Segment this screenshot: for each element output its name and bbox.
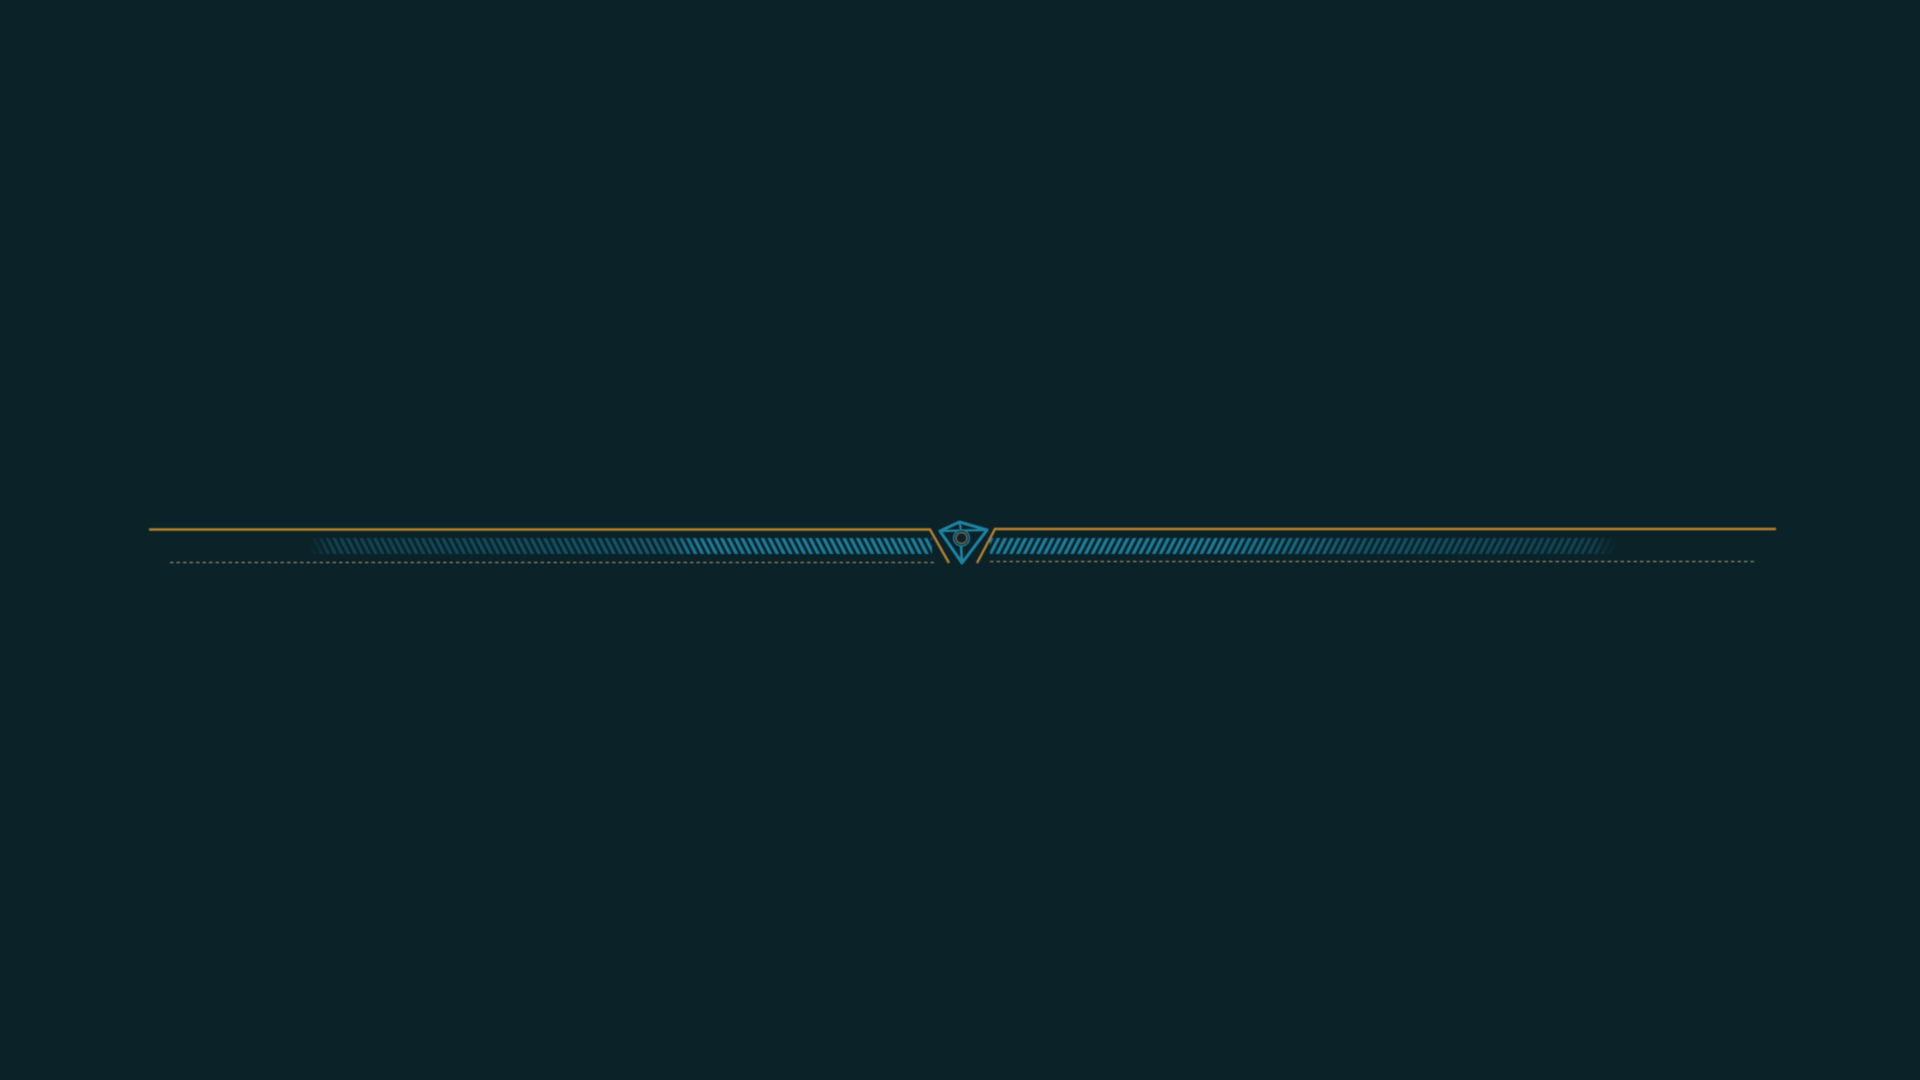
right gold rule with angled end bbox=[977, 529, 1776, 563]
left gold rule with angled end bbox=[149, 530, 949, 563]
divider ornament bbox=[149, 522, 1776, 563]
right hatched band bbox=[990, 538, 1616, 554]
left dashed line bbox=[170, 562, 935, 564]
left hatched band bbox=[308, 538, 932, 554]
right dashed line bbox=[990, 560, 1755, 562]
icon: diamond emblem bbox=[940, 522, 987, 563]
